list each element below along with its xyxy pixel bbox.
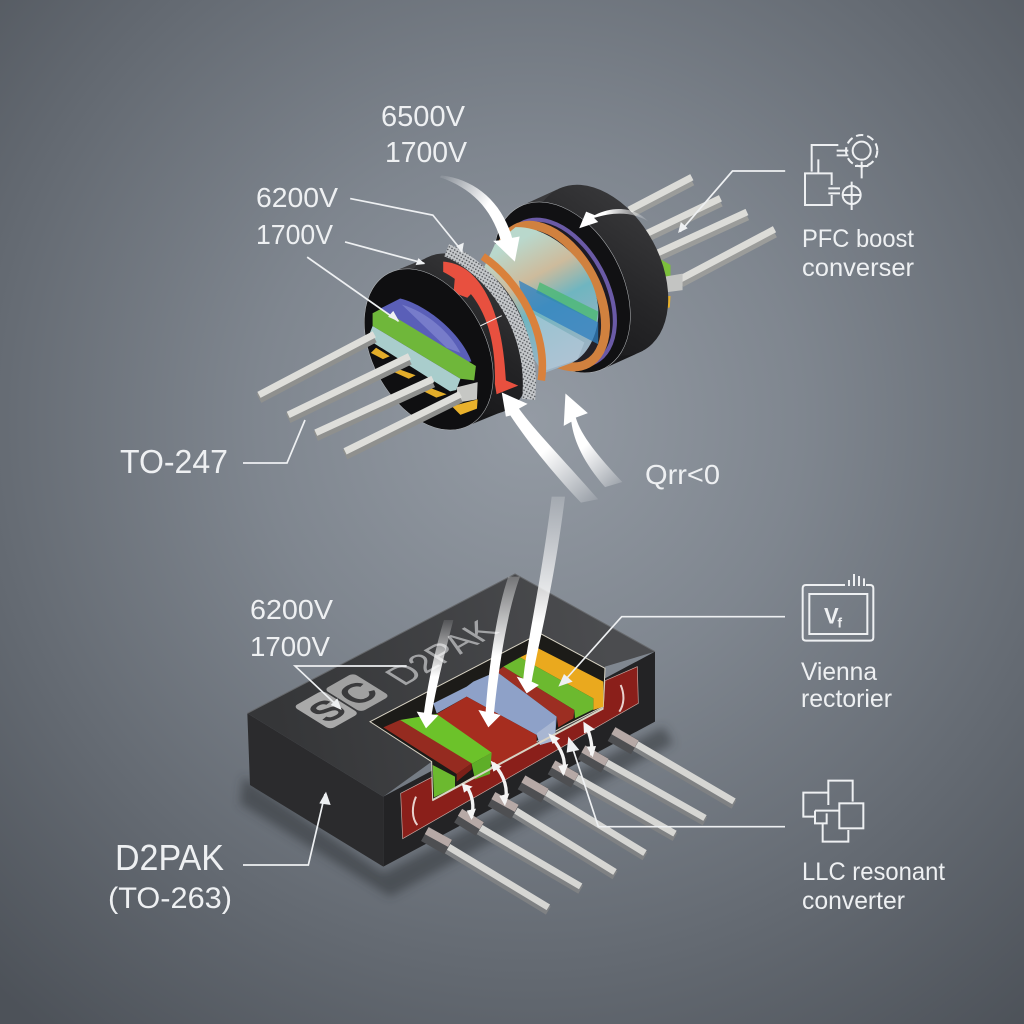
label: PFC boost converter: PFC boost (802, 225, 914, 253)
label: Qrr<0: Qrr<0 (645, 459, 720, 490)
D2PAK device illustration (240, 497, 785, 911)
label: 6200V 1700V left: 1700V (256, 219, 333, 250)
label: D2PAK (TO-263): (TO-263) (108, 882, 232, 915)
green layer (373, 309, 476, 380)
logo SC: C (328, 675, 389, 712)
small double arrows (467, 727, 592, 817)
label: D2PAK (TO-263): D2PAK (115, 837, 224, 878)
label: Vienna rectorier: Vienna (801, 658, 877, 686)
right pins (629, 177, 775, 282)
right cap (466, 161, 696, 396)
front red panels (401, 667, 638, 839)
red strip front (383, 720, 472, 774)
left face (247, 713, 383, 867)
label: PFC boost converter: converser (802, 254, 914, 282)
D2PAK engraved: D2PAK (375, 614, 507, 691)
arrow: top curve (440, 175, 520, 262)
package markings (293, 614, 507, 731)
label: 6500V 1700V top: 1700V (385, 137, 468, 169)
floor shadow (240, 727, 673, 897)
icon: LLC blocks (803, 781, 863, 842)
leader arrow heads (388, 222, 688, 322)
blue layer (381, 298, 471, 364)
orange band (483, 256, 542, 380)
label: 6200V 1700V left: 6200V (256, 182, 338, 213)
left cap (376, 231, 557, 437)
green block front (433, 765, 455, 797)
TO-247 leader (243, 420, 305, 463)
label: 6500V 1700V top (381, 101, 468, 169)
bottom lip (433, 708, 603, 800)
logo SC: S (298, 693, 357, 729)
label: D2PAK (TO-263) (108, 837, 232, 915)
arrows on TO-247 (307, 171, 785, 503)
D2PAK pins (425, 731, 734, 911)
red strip rear (497, 667, 574, 727)
red arrow on cap (443, 262, 518, 394)
TO-247 device illustration (259, 161, 775, 455)
yellow strips (371, 348, 447, 398)
green strip front (400, 714, 492, 764)
icon: Vf meter: V (824, 603, 839, 628)
front face (338, 247, 519, 452)
icon: Vf meter (803, 574, 873, 641)
label: LLC resonant converter (802, 858, 945, 915)
label: PFC boost converter (802, 225, 914, 282)
left pins (259, 334, 460, 455)
arrow: lower two (564, 394, 622, 487)
arrow: right curve (579, 209, 648, 228)
icon: Vf meter: f (837, 614, 842, 630)
label: TO-247: TO-247 (120, 443, 228, 480)
leader lines (307, 171, 785, 321)
yellow layer (520, 648, 603, 710)
top face (247, 574, 655, 800)
icon: PFC circuit (805, 135, 877, 210)
blue layer (433, 672, 557, 745)
label: 6500V 1700V top: 6500V (381, 101, 466, 133)
label: LLC resonant converter: LLC resonant (802, 858, 945, 886)
glass cylinder (481, 227, 598, 374)
leader lines (243, 617, 785, 865)
label: Vienna rectorier: rectorier (801, 685, 892, 713)
right end chip layers (650, 253, 683, 309)
down arrows (417, 497, 565, 728)
red layer middle (437, 697, 537, 767)
label: LLC resonant converter: converter (802, 887, 905, 915)
leader arrow heads (319, 674, 579, 805)
silver mesh band (447, 250, 529, 399)
logo SC (293, 673, 391, 731)
arrow: lower one (502, 392, 598, 503)
label: 6200V 1700V bottom (250, 594, 333, 662)
glass layer (367, 326, 460, 391)
highlight line (474, 316, 502, 329)
front face (383, 652, 655, 867)
label: 6200V 1700V left (256, 182, 338, 250)
label: 6200V 1700V bottom: 1700V (250, 631, 330, 662)
cutaway window (370, 633, 605, 800)
green layer rear (503, 657, 593, 718)
label: Vienna rectorier (801, 658, 892, 713)
small arrow heads (462, 722, 596, 820)
inner rings (476, 201, 638, 385)
label: 6200V 1700V bottom: 6200V (250, 594, 333, 625)
